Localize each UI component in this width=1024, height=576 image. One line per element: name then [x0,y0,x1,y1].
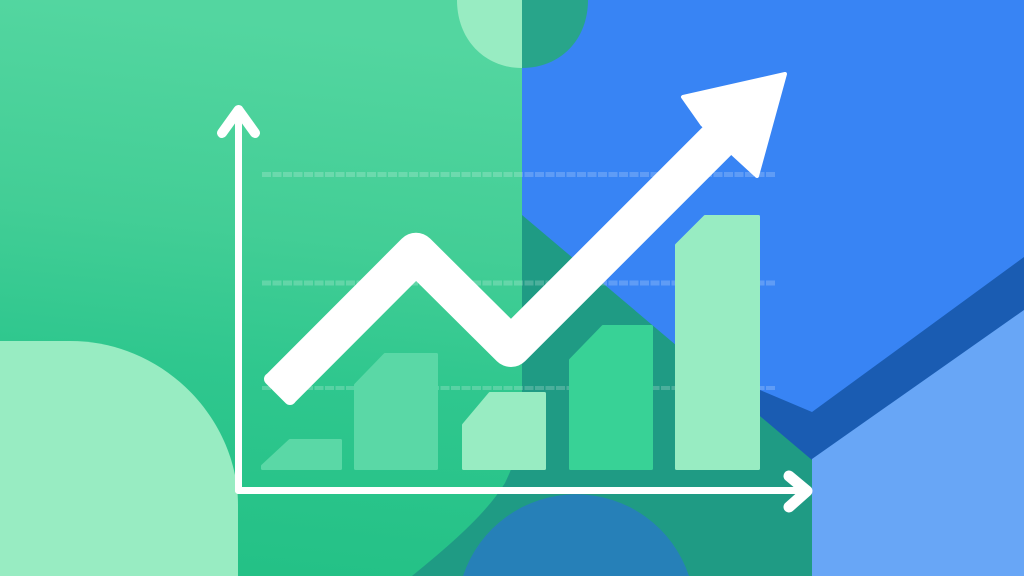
panel: blue background [522,0,1024,576]
bar 5 [676,216,758,468]
bar 4 [570,326,652,468]
grid lines [262,174,775,388]
trend line [280,140,718,389]
axes [222,110,807,507]
y axis [235,110,242,490]
shape: dark blue band [745,257,1024,470]
bar chart [262,216,758,468]
bar 1 [262,440,340,468]
arrowhead [683,74,785,176]
shape: top blob, left half [457,0,522,68]
x axis arrowhead [789,476,807,507]
trend line rounded tail [270,379,290,399]
bar 2 [356,354,436,468]
panel: green background [0,0,522,576]
bar 3 [464,394,544,468]
y axis arrowhead [222,110,255,133]
shape: light blue panel [812,310,1024,576]
trend arrow [270,74,785,399]
x axis [238,487,806,494]
shape: lower left light green blob [0,341,238,576]
shape: teal panel [412,215,812,576]
shape: bottom blue circle [463,494,689,576]
shape: top blob, right half [522,0,588,68]
